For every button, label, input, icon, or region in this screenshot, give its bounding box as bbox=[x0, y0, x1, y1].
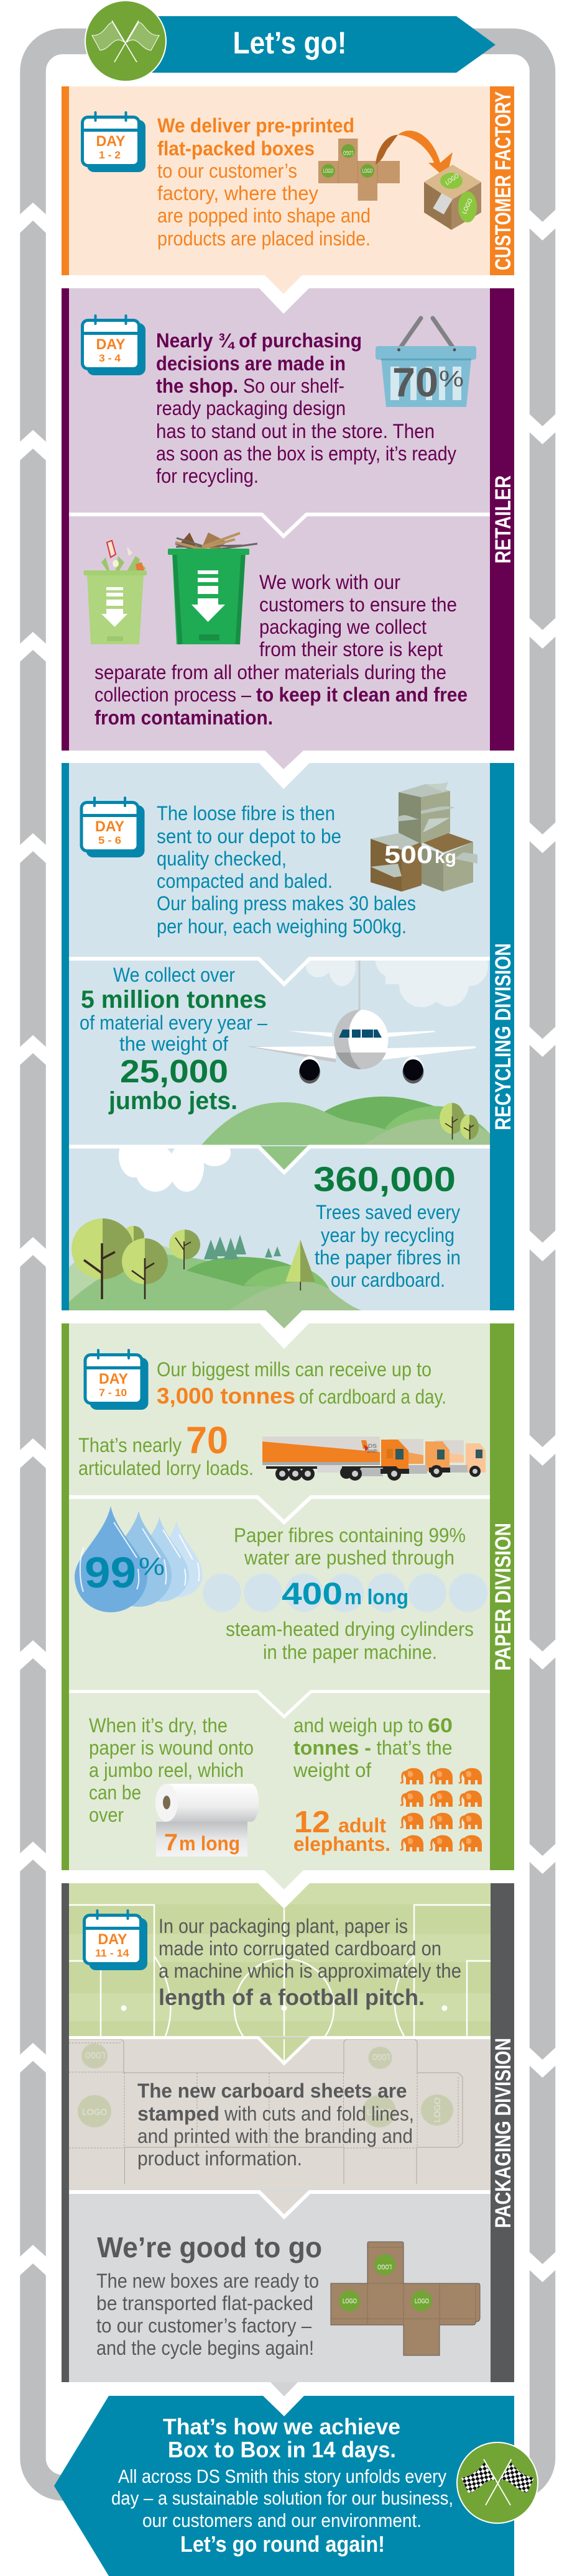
divider chevron 2 bbox=[69, 1691, 490, 1717]
icon: shopping basket 70% bbox=[376, 318, 476, 407]
first lorry: Smith bbox=[367, 1448, 377, 1454]
text: box to box conclusion: day – a sustainable solution for our business, bbox=[111, 2487, 453, 2509]
panel: customer factory bbox=[62, 86, 515, 275]
text: jumbo reel: a jumbo reel, which bbox=[89, 1759, 244, 1781]
plane bbox=[246, 961, 476, 1084]
cardboard sheet: LOGO bbox=[367, 2107, 392, 2117]
text: 400m long drying cylinders: 400 bbox=[282, 1576, 343, 1611]
text: 12 adult elephants bbox=[293, 1714, 453, 1855]
icon: flat box net bbox=[318, 139, 400, 201]
icon: flat box net with logos bbox=[331, 2242, 480, 2355]
icon: closed box: LOGO bbox=[444, 173, 461, 186]
divider chevron 1 bbox=[69, 959, 490, 984]
section label: retailer: RETAILER bbox=[491, 475, 515, 564]
drying cylinders bbox=[203, 1573, 487, 1612]
icon: calendar day 5-6: 5 - 6 bbox=[98, 834, 121, 846]
icon: cardboard recycling bin bbox=[168, 532, 257, 644]
text: baling: per hour, each weighing 500kg. bbox=[157, 915, 407, 938]
text: baling: Our baling press makes 30 bales bbox=[157, 892, 416, 915]
icon: calendar day 11-14 bbox=[83, 1909, 147, 1970]
second lorry bbox=[389, 1439, 450, 1478]
text: purchasing decisions: has to stand out in the store. Then bbox=[156, 420, 435, 442]
icon: chequered flags badge bbox=[457, 2442, 538, 2523]
text: football pitch length: made into corrugated cardboard on bbox=[159, 1937, 441, 1960]
text: 5 million tonnes: 25,000 bbox=[120, 1054, 228, 1090]
icon: calendar day 3-4: DAY bbox=[96, 336, 126, 353]
cardboard sheet: LOGO bbox=[85, 2050, 105, 2060]
text: 12 adult elephants: elephants. bbox=[293, 1833, 390, 1855]
text: 12 adult elephants: 60 bbox=[428, 1714, 453, 1737]
icon: flat box net with logos: LOGO bbox=[343, 2298, 357, 2305]
panel: retailer bbox=[62, 275, 515, 751]
icon: water drops 99% bbox=[75, 1506, 203, 1612]
text: purchasing decisions: Nearly ¾ of purchasing bbox=[156, 329, 362, 352]
text: baling bbox=[157, 802, 416, 938]
text: football pitch length: In our packaging plant, paper is bbox=[159, 1915, 408, 1937]
first lorry bbox=[262, 1436, 409, 1481]
panel: packaging division bbox=[62, 1870, 515, 2382]
divider chevron 1 bbox=[69, 2037, 491, 2063]
panel: recycling division bbox=[62, 751, 515, 1310]
section label: customer factory: CUSTOMER FACTORY bbox=[491, 91, 515, 270]
text: keep it clean: collection process – bbox=[95, 683, 251, 706]
icon: calendar day 7-10 bbox=[83, 1349, 148, 1410]
text: 360,000 trees bbox=[313, 1159, 461, 1291]
text: baling: quality checked, bbox=[157, 847, 287, 870]
section label: paper division: PAPER DIVISION bbox=[491, 1523, 515, 1671]
text: 3,000 tonnes and 70 lorry loads: of cardboard a day. bbox=[299, 1386, 446, 1408]
panel: paper division bbox=[62, 1310, 515, 1870]
text: 12 adult elephants: tonnes - bbox=[293, 1737, 371, 1759]
text: jumbo reel bbox=[89, 1714, 254, 1826]
text: 3,000 tonnes and 70 lorry loads bbox=[78, 1358, 446, 1479]
icon: calendar day 3-4 bbox=[81, 314, 145, 375]
text: 5 million tonnes: of material every year – bbox=[80, 1012, 267, 1034]
hills and trees bbox=[69, 1218, 361, 1310]
icon: calendar day 7-10: DAY bbox=[99, 1371, 128, 1387]
text: jumbo reel: can be bbox=[89, 1781, 141, 1804]
text: purchasing decisions bbox=[156, 329, 456, 487]
text: keep it clean: customers to ensure the bbox=[259, 593, 457, 616]
first lorry: DS bbox=[368, 1443, 377, 1449]
text: 12 adult elephants: adult bbox=[338, 1814, 386, 1837]
text: keep it clean: to keep it clean and free bbox=[256, 683, 468, 706]
icon: paper bales 500kg: kg bbox=[435, 847, 456, 867]
text: 360,000 trees: Trees saved every bbox=[316, 1201, 460, 1223]
icon: paper bales 500kg: 500 bbox=[384, 841, 433, 869]
icon: flat box net with logos: LOGO bbox=[415, 2298, 429, 2305]
text: jumbo reel: When it’s dry, the bbox=[89, 1714, 228, 1737]
text: stamped sheets: and printed with the branding and bbox=[137, 2125, 413, 2147]
text: we're good to go: and the cycle begins again! bbox=[96, 2337, 314, 2359]
notch with tip of previous panel bbox=[257, 1870, 310, 1909]
header banner: Let's go bbox=[152, 16, 496, 73]
icon: water drops 99%: % bbox=[139, 1553, 165, 1581]
icon: twelve elephants bbox=[400, 1768, 482, 1852]
section label: packaging division: PACKAGING DIVISION bbox=[491, 2038, 515, 2228]
icon: calendar day 11-14: DAY bbox=[98, 1931, 127, 1948]
cardboard sheet bbox=[69, 2039, 491, 2190]
icon: food waste bin bbox=[83, 541, 147, 644]
text: 400m long drying cylinders: steam-heated drying cylinders bbox=[226, 1618, 474, 1640]
text: 400m long drying cylinders: water are pushed through bbox=[244, 1546, 454, 1569]
text: stamped sheets: The new carboard sheets are bbox=[137, 2080, 407, 2102]
forest scene bbox=[69, 1134, 461, 1310]
text: 3,000 tonnes and 70 lorry loads: articulated lorry loads. bbox=[78, 1457, 254, 1479]
text: 12 adult elephants: 12 bbox=[294, 1806, 330, 1839]
icon: paper roll 7m long: 7 bbox=[164, 1830, 178, 1856]
icon: flat box net: LOGO bbox=[343, 150, 353, 156]
text: flat-packed boxes: products are placed inside. bbox=[157, 227, 371, 250]
divider chevron 2 bbox=[69, 1146, 490, 1172]
icon: calendar day 3-4: 3 - 4 bbox=[99, 352, 121, 364]
icon: flat box net: LOGO bbox=[323, 168, 333, 174]
text: flat-packed boxes: are popped into shape and bbox=[157, 204, 371, 227]
text: purchasing decisions: decisions are made in bbox=[156, 352, 346, 375]
text: box to box conclusion: All across DS Smith this story unfolds every bbox=[118, 2465, 446, 2487]
third lorry bbox=[435, 1440, 486, 1477]
text: jumbo reel: paper is wound onto bbox=[89, 1737, 254, 1759]
text: we're good to go bbox=[96, 2231, 322, 2359]
final banner bbox=[54, 2382, 514, 2576]
arrow: orange curve into box bbox=[376, 130, 453, 179]
cardboard sheet: LOGO bbox=[82, 2107, 107, 2117]
text: box to box conclusion: That’s how we achieve bbox=[163, 2414, 400, 2439]
text: football pitch length: length of a football pitch. bbox=[159, 1985, 425, 2010]
text: flat-packed boxes: to our customer’s bbox=[157, 160, 297, 182]
text: 5 million tonnes: We collect over bbox=[113, 964, 235, 986]
icon: calendar day 1-2 bbox=[81, 111, 145, 172]
text: keep it clean: from their store is kept bbox=[259, 638, 443, 660]
icon: calendar day 1-2: 1 - 2 bbox=[99, 149, 121, 161]
divider chevron 1 bbox=[69, 1497, 490, 1522]
section label: recycling division: RECYCLING DIVISION bbox=[491, 943, 515, 1130]
sky scene with plane bbox=[80, 942, 490, 1145]
text: we're good to go: We’re good to go bbox=[97, 2231, 322, 2263]
text: football pitch length: a machine which is approximately the bbox=[159, 1960, 461, 1982]
text: stamped sheets: product information. bbox=[137, 2147, 302, 2170]
text: 400m long drying cylinders bbox=[226, 1524, 474, 1663]
text: box to box conclusion: Box to Box in 14 days. bbox=[168, 2437, 396, 2462]
text: 5 million tonnes bbox=[80, 964, 267, 1115]
text: box to box conclusion: our customers and our environment. bbox=[142, 2510, 422, 2531]
text: 360,000 trees: 360,000 bbox=[313, 1159, 456, 1199]
text: keep it clean: separate from all other materials during the bbox=[95, 661, 446, 683]
hills and trees bbox=[201, 1097, 490, 1145]
icon: closed box: LOGO bbox=[461, 198, 474, 215]
icon: paper roll 7m long bbox=[155, 1784, 259, 1857]
text: flat-packed boxes: flat-packed boxes bbox=[157, 137, 315, 160]
icon: water drops 99%: 99 bbox=[85, 1548, 136, 1597]
icon: calendar day 5-6 bbox=[80, 797, 144, 857]
cardboard sheet: LOGO bbox=[372, 2052, 390, 2062]
text: stamped sheets: with cuts and fold lines, bbox=[224, 2103, 414, 2125]
text: box to box conclusion: Let’s go round again! bbox=[180, 2531, 385, 2557]
divider chevron 2 bbox=[69, 2192, 491, 2217]
text: football pitch length bbox=[159, 1915, 461, 2010]
text: we're good to go: be transported flat-packed bbox=[96, 2292, 313, 2314]
text: we're good to go: The new boxes are ready to bbox=[96, 2270, 319, 2292]
text: 5 million tonnes: the weight of bbox=[119, 1033, 228, 1055]
icon: shopping basket 70%: 70 bbox=[392, 359, 438, 405]
text: keep it clean bbox=[95, 571, 468, 729]
text: box to box conclusion bbox=[111, 2414, 453, 2557]
text: purchasing decisions: the shop. bbox=[156, 375, 238, 397]
clouds bbox=[306, 961, 488, 1007]
text: baling: sent to our depot to be bbox=[157, 825, 341, 847]
icon: three lorries bbox=[262, 1436, 486, 1481]
text: 360,000 trees: the paper fibres in bbox=[315, 1246, 461, 1269]
text: 400m long drying cylinders: Paper fibres containing 99% bbox=[234, 1524, 466, 1546]
notch with tip of previous panel bbox=[259, 1310, 310, 1349]
notch with tip of previous panel bbox=[259, 275, 310, 314]
text: 5 million tonnes: jumbo jets. bbox=[108, 1087, 238, 1115]
text: 12 adult elephants: that’s the bbox=[377, 1737, 453, 1759]
text: baling: The loose fibre is then bbox=[157, 802, 335, 824]
text: 12 adult elephants: weight of bbox=[293, 1759, 371, 1781]
text: 360,000 trees: our cardboard. bbox=[331, 1269, 445, 1291]
icon: flat box net: LOGO bbox=[362, 168, 372, 174]
text: keep it clean: packaging we collect bbox=[259, 616, 427, 638]
text: purchasing decisions: as soon as the box is empty, it’s ready bbox=[156, 442, 456, 465]
text: purchasing decisions: ready packaging design bbox=[156, 397, 346, 419]
cardboard sheet: LOGO bbox=[432, 2098, 442, 2122]
football pitch bbox=[69, 1883, 491, 2036]
text: keep it clean: We work with our bbox=[259, 571, 400, 593]
text: jumbo reel: over bbox=[89, 1804, 124, 1826]
text: 400m long drying cylinders: in the paper machine. bbox=[263, 1641, 437, 1663]
notch with tip of previous panel bbox=[259, 751, 310, 789]
text: baling: compacted and baled. bbox=[157, 870, 333, 892]
divider chevron bbox=[69, 514, 490, 536]
icon: closed box bbox=[424, 165, 481, 230]
icon: paper roll 7m long: m long bbox=[179, 1832, 240, 1855]
text: flat-packed boxes: factory, where they bbox=[157, 182, 318, 204]
text: 360,000 trees: year by recycling bbox=[321, 1224, 454, 1246]
text: purchasing decisions: for recycling. bbox=[156, 465, 259, 487]
header banner: Let's go: Let’s go! bbox=[233, 25, 347, 60]
text: 3,000 tonnes and 70 lorry loads: That’s nearly bbox=[78, 1434, 182, 1456]
icon: calendar day 5-6: DAY bbox=[95, 818, 124, 835]
icon: calendar day 7-10: 7 - 10 bbox=[99, 1387, 127, 1399]
text: 5 million tonnes: 5 million tonnes bbox=[81, 986, 267, 1013]
text: we're good to go: to our customer’s factory – bbox=[96, 2314, 311, 2337]
icon: shopping basket 70%: % bbox=[439, 366, 464, 391]
text: 3,000 tonnes and 70 lorry loads: 70 bbox=[186, 1419, 228, 1461]
icon: green flags badge bbox=[85, 1, 166, 81]
text: keep it clean: from contamination. bbox=[95, 706, 273, 729]
text: flat-packed boxes bbox=[157, 114, 371, 250]
text: 400m long drying cylinders: m long bbox=[344, 1586, 408, 1609]
text: flat-packed boxes: We deliver pre-printed bbox=[157, 114, 354, 137]
icon: calendar day 11-14: 11 - 14 bbox=[95, 1947, 129, 1959]
white cloud bbox=[119, 1148, 231, 1192]
text: 3,000 tonnes and 70 lorry loads: 3,000 tonnes bbox=[157, 1383, 295, 1409]
text: purchasing decisions: So our shelf- bbox=[243, 375, 344, 397]
icon: paper bales 500kg bbox=[371, 782, 477, 892]
icon: calendar day 1-2: DAY bbox=[96, 133, 126, 150]
text: 3,000 tonnes and 70 lorry loads: Our biggest mills can receive up to bbox=[157, 1358, 431, 1381]
icon: flat box net with logos: LOGO bbox=[377, 2263, 392, 2270]
text: 12 adult elephants: and weigh up to bbox=[293, 1714, 423, 1737]
text: stamped sheets bbox=[137, 2080, 414, 2170]
text: stamped sheets: stamped bbox=[137, 2103, 219, 2125]
